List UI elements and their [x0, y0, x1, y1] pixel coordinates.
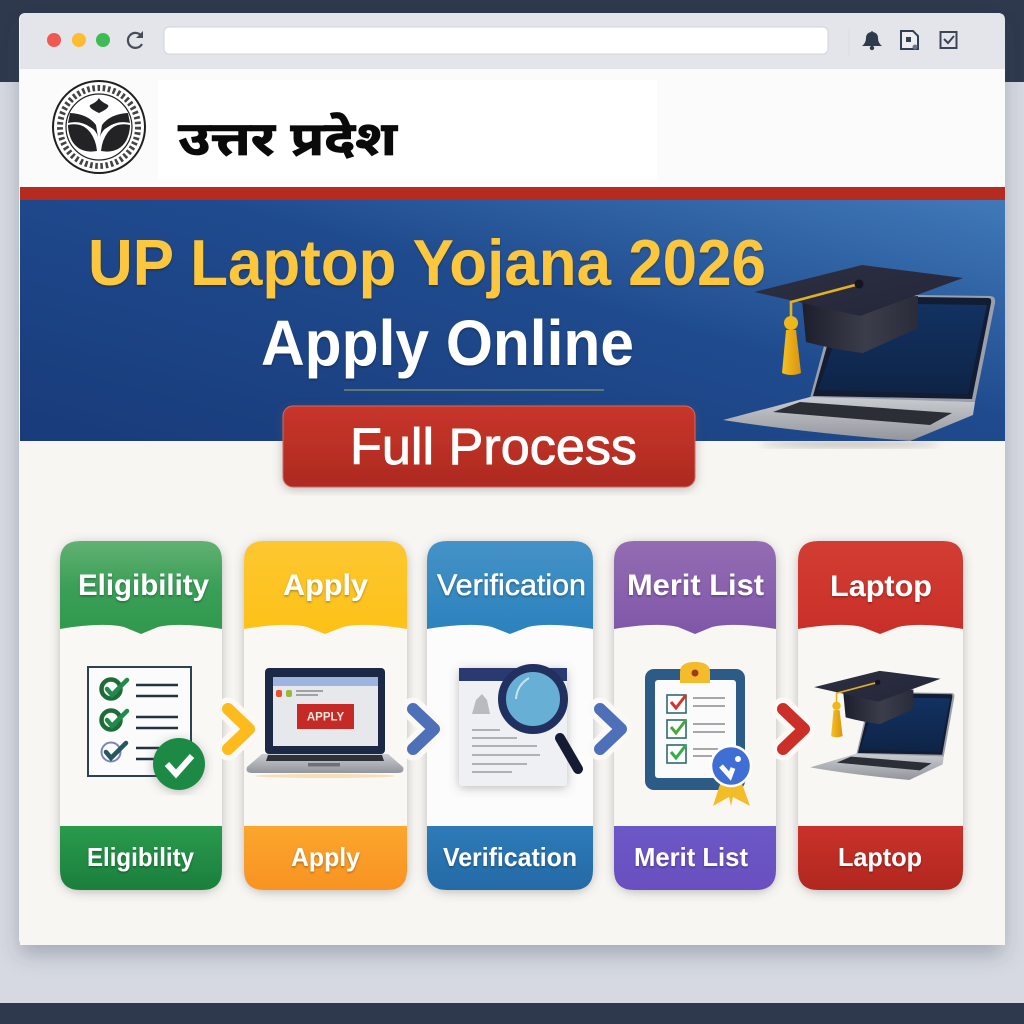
icon: clipboard with badge	[645, 662, 751, 806]
icon: graduation cap on laptop	[810, 671, 954, 780]
red stripe	[20, 187, 1005, 200]
card footer: Apply	[291, 842, 361, 872]
button: full process	[283, 406, 695, 487]
card footer: Verification	[443, 842, 577, 872]
card header: Eligibility	[78, 569, 209, 602]
card header	[244, 541, 407, 634]
arrow: eligibility to apply	[228, 709, 249, 749]
card footer	[798, 826, 963, 890]
browser toolbar	[20, 13, 1005, 69]
icon: bell	[862, 31, 882, 50]
arrow: verification to merit list	[600, 709, 621, 749]
card: eligibility	[60, 541, 222, 890]
card header	[60, 541, 222, 634]
card header: Laptop	[830, 570, 932, 603]
card: merit list	[614, 541, 776, 890]
card footer: Laptop	[838, 842, 922, 872]
card footer	[244, 826, 407, 890]
card footer	[427, 826, 593, 890]
button: full process: Full Process	[350, 418, 637, 475]
header band	[20, 69, 1005, 187]
card header	[614, 541, 776, 634]
card header	[798, 541, 963, 634]
icon: checkbox	[940, 32, 956, 48]
card header: Merit List	[627, 569, 764, 602]
icon: document	[901, 31, 918, 50]
cream process area	[20, 441, 1005, 945]
heading: subtitle: Apply Online	[261, 307, 634, 379]
card footer: Eligibility	[87, 842, 194, 872]
arrow: apply to verification	[413, 709, 434, 749]
heading: main title: UP Laptop Yojana 2026	[88, 226, 766, 299]
card header	[427, 541, 593, 634]
icon: checklist	[88, 667, 205, 790]
icon: state emblem	[53, 81, 145, 173]
card footer	[614, 826, 776, 890]
card footer	[60, 826, 222, 890]
hero banner	[20, 200, 1005, 441]
arrow: merit list to laptop	[783, 709, 804, 749]
card header: Verification	[437, 569, 586, 602]
card: verification	[427, 541, 593, 890]
card: laptop	[798, 541, 963, 890]
icon: laptop with apply button	[247, 668, 403, 778]
icon: laptop with apply button: APPLY	[307, 712, 344, 724]
title: state name: उत्तर प्रदेश	[178, 112, 399, 165]
card: apply	[244, 541, 407, 890]
card header: Apply	[283, 569, 368, 602]
icon: document and magnifier	[459, 668, 578, 786]
illustration: graduation cap on laptop	[723, 265, 995, 441]
card footer: Merit List	[634, 842, 748, 872]
